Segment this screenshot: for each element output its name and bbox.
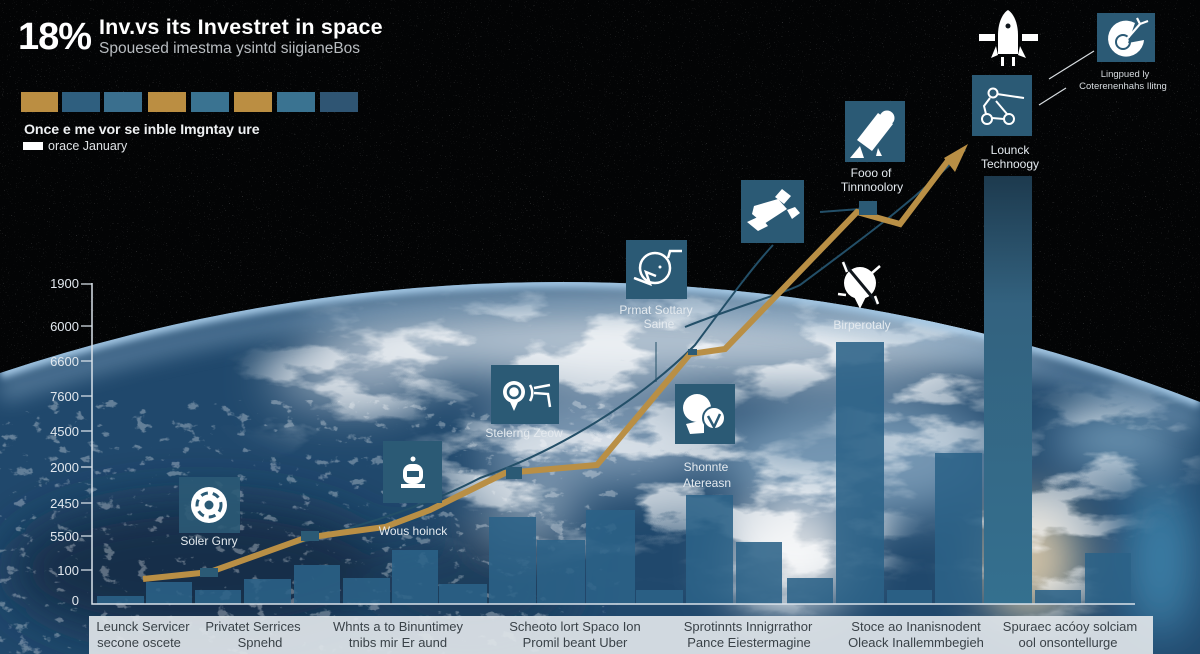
node: Prmat Sottary Saine [619,240,693,331]
node: Birperotaly planet: Birperotaly [833,318,891,332]
node: Stelerng Zeow: Stelerng Zeow [485,426,563,440]
icon: planet [838,262,880,306]
node: Prmat Sottary Saine: Saine [644,317,675,331]
node: Lounck Technoogy: Technoogy [981,157,1039,171]
category label strip: Spnehd [238,635,282,650]
icon: gear disc [191,487,227,523]
node: Lounck Technoogy: Lounck [991,143,1030,157]
gold growth arrow [143,144,968,579]
node: Prmat Sottary Saine: Prmat Sottary [619,303,693,317]
y axis [50,276,1135,608]
node: Fooo of Tinnnoolory [841,101,905,194]
node: Lingpued ly callout [1079,13,1167,92]
y axis: 2000 [50,460,79,475]
y axis: 4500 [50,424,79,439]
node: Shonnte Atereasn: Atereasn [683,476,731,490]
y axis: 2450 [50,496,79,511]
node: Soler Gnry: Soler Gnry [180,534,238,548]
node: Shonnte Atereasn: Shonnte [684,460,729,474]
category label strip: Scheoto lort Spaco Ion [509,619,641,634]
category label strip: Spuraec acóoy solciam [1003,619,1137,634]
legend text: Once e me vor se inble Imgntay ure [24,122,260,138]
y axis: 5500 [50,529,79,544]
node: Stelerng Zeow [485,365,563,440]
icon: target with wing [503,381,550,411]
earth horizon photo [0,270,1200,654]
node: Fooo of Tinnnoolory: Tinnnoolory [841,180,903,194]
node: Lingpued ly callout: Lingpued ly [1101,69,1150,80]
category label strip [89,616,1153,654]
y axis: 6600 [50,354,79,369]
y axis: 100 [57,563,79,578]
y axis: 6000 [50,319,79,334]
y axis: 7600 [50,389,79,404]
category label strip: secone oscete [97,635,181,650]
y axis: 0 [72,593,79,608]
category label strip: Sprotinnts Innigrrathor [684,619,813,634]
category label strip: Privatet Serrices [205,619,301,634]
icon: robot [401,456,425,488]
title block [18,15,383,58]
headline: Inv.vs its Investret in space [99,15,383,39]
legend text [23,122,260,153]
colour legend bars [21,92,358,112]
node: Soler Gnry [179,477,240,548]
node: Wous hoinck [379,441,448,538]
node: satellite [741,180,804,243]
category label strip: Pance Eiestermagine [687,635,811,650]
thin teal trend lines [222,150,965,566]
node: Lingpued ly callout: Coterenenhahs Ilitng [1079,81,1167,92]
node: Fooo of Tinnnoolory: Fooo of [851,166,892,180]
subtitle: Spouesed imestma ysintd siigianeBos [99,40,360,57]
category label strip: tnibs mir Er aund [349,635,447,650]
category label strip: Stoce ao Inanisnodent [851,619,981,634]
icon: target and wrench [1108,18,1148,57]
node: Shonnte Atereasn [675,384,735,490]
category label strip: Oleack Inallemmbegieh [848,635,984,650]
node: Birperotaly planet [833,262,891,332]
node: Wous hoinck: Wous hoinck [379,524,448,538]
icon: ring satellite [634,251,682,284]
category label strip: Leunck Servicer [96,619,190,634]
icon: telescope [850,110,894,158]
icon: moon and shield [683,394,725,434]
icon: white rocket [979,10,1038,66]
node: Lounck Technoogy [972,75,1039,171]
headline stat: 18% [18,16,91,58]
bar chart [97,176,1131,604]
y axis: 1900 [50,276,79,291]
callout leader lines [1039,51,1094,105]
category label strip: Promil beant Uber [523,635,628,650]
legend text: orace January [48,139,128,153]
category label strip: ool onsontellurge [1018,635,1118,650]
icon: linked circles [982,88,1024,124]
icon: satellite [747,189,800,231]
category label strip: Whnts a to Binuntimey [333,619,464,634]
line markers [200,201,877,577]
